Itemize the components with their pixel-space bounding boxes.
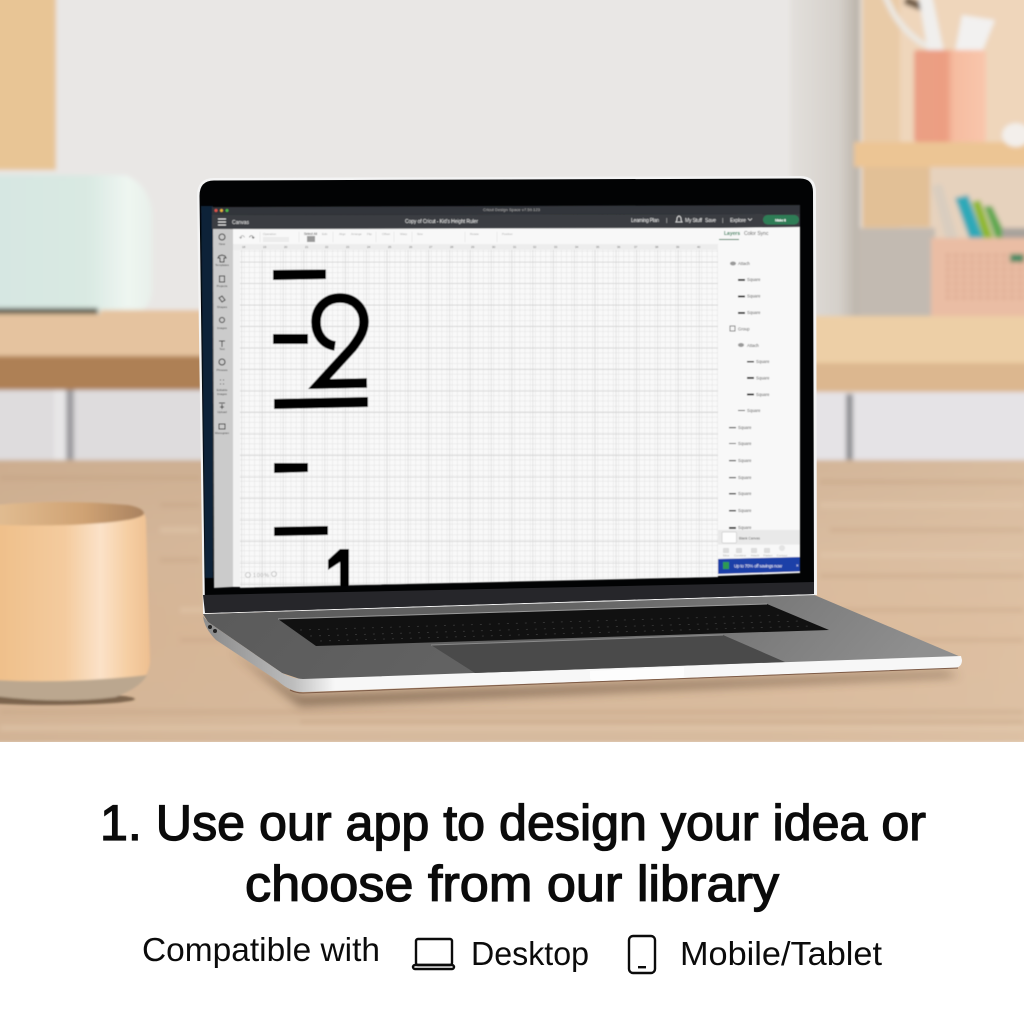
layer list: Attach bbox=[738, 261, 751, 266]
layer list: Square bbox=[747, 310, 761, 315]
promo banner bbox=[718, 557, 800, 574]
drawers right bbox=[812, 392, 1024, 460]
layer list: Group bbox=[738, 326, 750, 332]
screen bbox=[201, 205, 800, 590]
horizontal ruler: 22 bbox=[325, 245, 329, 249]
layer actions: Flatten bbox=[763, 554, 773, 558]
mug bbox=[0, 502, 150, 705]
left tool sidebar: Images bbox=[217, 326, 227, 330]
panel tabs bbox=[719, 231, 769, 240]
left tool sidebar: Text bbox=[219, 347, 225, 351]
left tool sidebar: New bbox=[219, 242, 226, 246]
horizontal ruler: 34 bbox=[575, 245, 579, 249]
edit toolbar: Flip bbox=[367, 232, 372, 236]
layer list: Square bbox=[738, 425, 752, 430]
title bbox=[100, 795, 926, 912]
edit toolbar: ↶ bbox=[239, 235, 245, 242]
window title bar: Cricut Design Space v7.59.123 bbox=[483, 207, 541, 212]
basket with markers bbox=[931, 184, 1024, 318]
horizontal ruler: 28 bbox=[450, 245, 454, 249]
ruler mark: second bar bbox=[273, 334, 308, 344]
mobile tablet label: Mobile/Tablet bbox=[680, 935, 882, 972]
top navigation bar: Explore bbox=[730, 218, 746, 224]
canvas grid bbox=[240, 250, 718, 590]
left tool sidebar bbox=[213, 229, 233, 588]
layers panel bbox=[718, 227, 800, 576]
horizontal ruler: 26 bbox=[409, 245, 413, 249]
layer list: Square bbox=[738, 525, 752, 530]
desktop label: Desktop bbox=[471, 935, 589, 972]
layer list: Square bbox=[756, 359, 770, 364]
edit toolbar: Position bbox=[502, 232, 513, 236]
top navigation bar: Save bbox=[705, 218, 716, 224]
ruler mark: long bar bbox=[274, 397, 368, 409]
shadowed wall under unit bbox=[858, 228, 935, 318]
hinge strip bbox=[203, 582, 814, 613]
horizontal ruler: 31 bbox=[513, 245, 517, 249]
edit toolbar: Size bbox=[417, 232, 423, 236]
ruler mark: fifth bar bbox=[274, 526, 328, 536]
left tool sidebar: Upload bbox=[217, 410, 227, 414]
title: 1. Use our app to design your idea or bbox=[100, 795, 926, 851]
horizontal ruler: 23 bbox=[346, 245, 350, 249]
layer list: Square bbox=[747, 277, 761, 282]
mug contact shadow bbox=[0, 693, 135, 705]
top navigation bar: Learning Plan bbox=[631, 218, 659, 224]
left tool sidebar: Projects bbox=[217, 284, 228, 288]
top navigation bar: Copy of Cricut - Kid's Height Ruler bbox=[405, 219, 478, 225]
compatible with label: Compatible with bbox=[142, 931, 380, 968]
layer list: Square bbox=[738, 458, 752, 463]
layer actions: Attach bbox=[751, 554, 760, 558]
blank canvas row: Blank Canvas bbox=[739, 536, 760, 540]
horizontal ruler: 40 bbox=[697, 245, 701, 249]
keyboard bbox=[278, 604, 829, 646]
mug unglazed base bbox=[0, 675, 147, 700]
wall bbox=[0, 0, 1024, 330]
window title bar bbox=[212, 205, 800, 215]
horizontal ruler: 20 bbox=[284, 245, 288, 249]
layer actions: Combine bbox=[734, 554, 746, 558]
left tool sidebar: Monogram bbox=[215, 431, 230, 435]
lip underside edge bbox=[290, 668, 958, 693]
horizontal ruler: 19 bbox=[263, 245, 267, 249]
left tool sidebar: Images bbox=[217, 392, 227, 396]
horizontal ruler: 27 bbox=[429, 245, 433, 249]
layer list: Square bbox=[756, 376, 770, 380]
edit toolbar: Offset bbox=[382, 232, 390, 236]
wooden table bbox=[0, 460, 1024, 744]
pink pencil cup bbox=[885, 0, 1024, 147]
counter right bbox=[812, 316, 1024, 392]
horizontal ruler: 35 bbox=[596, 245, 600, 249]
layer list: Square bbox=[747, 408, 761, 413]
horizontal ruler: 18 bbox=[242, 245, 246, 249]
compatibility row bbox=[142, 931, 882, 973]
trackpad bbox=[431, 635, 785, 673]
laptop shadow bbox=[230, 650, 960, 706]
horizontal ruler: 37 bbox=[634, 245, 638, 249]
left dark blue wallpaper strip bbox=[201, 206, 213, 578]
top navigation bar: | bbox=[666, 218, 667, 224]
layer list: Square bbox=[747, 294, 761, 298]
zoom control bbox=[246, 572, 276, 579]
top navigation bar: Make It bbox=[775, 218, 787, 222]
promo banner: × bbox=[796, 563, 799, 568]
zoom control: 100% bbox=[253, 573, 269, 579]
edit toolbar: ↷ bbox=[249, 235, 255, 242]
blank canvas row bbox=[718, 530, 800, 544]
wooden wall unit right bbox=[854, 0, 1024, 318]
horizontal ruler bbox=[233, 244, 718, 250]
layer list: Square bbox=[738, 491, 752, 496]
laptop bbox=[197, 176, 962, 693]
icon: laptop bbox=[413, 939, 454, 969]
horizontal ruler: 21 bbox=[305, 245, 309, 249]
edit toolbar: Rotate bbox=[470, 232, 479, 236]
layer actions: Contour bbox=[777, 554, 787, 558]
number 1 bbox=[328, 549, 349, 586]
horizontal ruler: 30 bbox=[492, 245, 496, 249]
panel tabs: Layers bbox=[724, 231, 740, 237]
horizontal ruler: 32 bbox=[533, 245, 537, 249]
left tool sidebar: Templates bbox=[215, 263, 229, 267]
wooden wall shelf left bbox=[0, 0, 56, 170]
horizontal ruler: 24 bbox=[367, 245, 371, 249]
white caption panel bbox=[0, 742, 1024, 1024]
edit toolbar bbox=[232, 228, 718, 244]
horizontal ruler: 36 bbox=[617, 245, 621, 249]
panel tabs: Color Sync bbox=[744, 231, 769, 237]
edit toolbar: Operation bbox=[263, 232, 277, 236]
horizontal ruler: 25 bbox=[388, 245, 392, 249]
layer list: Square bbox=[738, 508, 752, 513]
layer actions bbox=[723, 545, 787, 558]
edit toolbar: Arrange bbox=[351, 232, 362, 236]
top navigation bar: My Stuff bbox=[685, 218, 703, 224]
ruler mark: fourth bar bbox=[274, 463, 308, 473]
drawers left bbox=[0, 390, 205, 460]
vertical ruler bbox=[233, 244, 240, 587]
edit toolbar: Warp bbox=[400, 232, 407, 236]
top navigation bar: | bbox=[722, 218, 723, 224]
icon: phone bbox=[629, 936, 655, 973]
number 2 bbox=[316, 298, 367, 384]
edit toolbar: Edit bbox=[322, 232, 327, 236]
ruler mark: top bar bbox=[273, 270, 326, 280]
horizontal ruler: 38 bbox=[655, 245, 659, 249]
photo background: kitchen scene bbox=[0, 0, 1024, 744]
horizontal ruler: 33 bbox=[554, 245, 558, 249]
ports bbox=[208, 625, 217, 633]
notch bbox=[590, 667, 684, 681]
mug body bbox=[0, 504, 150, 682]
top navigation bar: Canvas bbox=[232, 220, 249, 226]
layer list: Square bbox=[738, 475, 752, 480]
layer list: Square bbox=[756, 392, 770, 397]
edit toolbar: Select All bbox=[304, 232, 317, 236]
left tool sidebar: Editable bbox=[217, 388, 228, 392]
screen lid bbox=[197, 176, 817, 614]
horizontal ruler: 39 bbox=[676, 245, 680, 249]
left tool sidebar: Shapes bbox=[217, 305, 228, 309]
left tool sidebar: Phrases bbox=[216, 368, 228, 372]
front silver lip bbox=[203, 616, 962, 692]
cutting machine bbox=[0, 175, 152, 316]
promo banner: Up to 70% off savings now bbox=[734, 564, 783, 568]
layer actions: Slice bbox=[723, 554, 730, 558]
top navigation bar bbox=[212, 214, 800, 229]
layer list: Square bbox=[738, 441, 752, 446]
counter left bbox=[0, 310, 205, 390]
horizontal ruler: 29 bbox=[471, 245, 475, 249]
layer list bbox=[729, 261, 770, 530]
laptop base deck bbox=[203, 594, 961, 680]
mug inner rim bbox=[0, 502, 144, 526]
layer list: Attach bbox=[747, 343, 760, 348]
title: choose from our library bbox=[245, 856, 779, 912]
edit toolbar: Align bbox=[339, 232, 346, 236]
